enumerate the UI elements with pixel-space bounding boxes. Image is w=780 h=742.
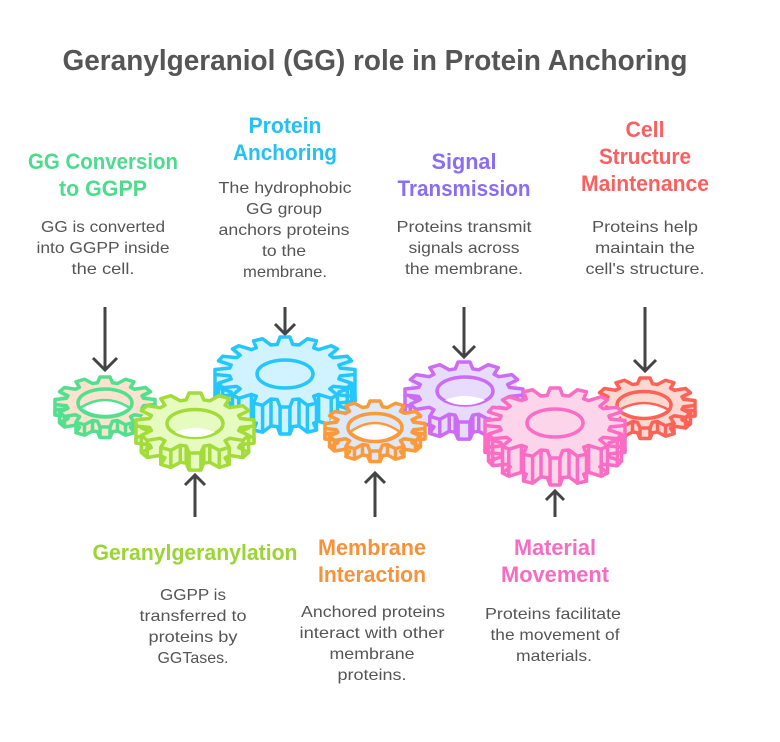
text: membrane interaction description: membrane — [330, 646, 415, 663]
text: signal transmission description: the membrane. — [405, 261, 523, 278]
arrow: up to lime gear — [185, 475, 205, 517]
text: membrane interaction description: Anchored proteins — [301, 604, 445, 621]
title: Geranylgeraniol (GG) role in Protein Anchoring — [62, 45, 688, 77]
heading: Cell Structure Maintenance: Cell — [626, 117, 664, 142]
heading: Protein Anchoring — [233, 113, 337, 165]
heading: Material Movement: Movement — [501, 562, 610, 587]
heading: Protein Anchoring: Protein — [248, 113, 322, 138]
text: membrane interaction description: interact with other — [300, 625, 445, 642]
heading: Membrane Interaction: Interaction — [318, 562, 426, 587]
text: protein anchoring description: GG group — [246, 201, 322, 218]
text: cell structure description — [586, 219, 704, 278]
text: protein anchoring description: to the — [262, 243, 306, 260]
text: GG conversion description — [36, 219, 170, 278]
heading: GG Conversion to GGPP: GG Conversion — [28, 149, 178, 174]
heading: Cell Structure Maintenance: Structure — [599, 144, 691, 169]
heading: Signal Transmission — [398, 149, 530, 201]
arrow: up to pink gear — [546, 491, 564, 517]
text: membrane interaction description: proteins. — [338, 667, 406, 684]
text: GG conversion description: into GGPP inside — [36, 240, 170, 257]
text: protein anchoring description: anchors proteins — [218, 222, 350, 239]
heading: Cell Structure Maintenance: Maintenance — [581, 171, 709, 196]
gear: green — [55, 377, 155, 438]
gear: pink — [485, 388, 625, 485]
heading: Protein Anchoring: Anchoring — [233, 140, 337, 165]
text: signal transmission description: signals across — [408, 240, 520, 257]
text: GG conversion description: the cell. — [72, 261, 134, 278]
text: material movement description: Proteins facilitate — [485, 606, 621, 623]
heading: Membrane Interaction: Membrane — [318, 535, 426, 560]
gear: lime — [136, 393, 254, 470]
text: geranylgeranylation description: proteins by — [148, 629, 238, 646]
gear: blue — [215, 337, 355, 434]
text: GG conversion description: GG is converted — [41, 219, 165, 236]
text: signal transmission description: Proteins transmit — [396, 219, 532, 236]
text: membrane interaction description — [300, 604, 445, 684]
arrow: down to purple gear — [453, 307, 475, 357]
arrow: down to blue gear — [275, 307, 295, 334]
heading: Material Movement — [501, 535, 610, 587]
text: material movement description: the movement of — [490, 627, 620, 644]
gear: purple — [405, 362, 523, 439]
text: protein anchoring description — [218, 180, 352, 281]
text: signal transmission description — [396, 219, 532, 278]
text: geranylgeranylation description — [140, 587, 247, 667]
arrow: down to green gear — [93, 307, 117, 370]
text: cell structure description: cell's structure. — [586, 261, 704, 278]
text: material movement description — [485, 606, 621, 665]
text: geranylgeranylation description: transferred to — [140, 608, 247, 625]
heading: Cell Structure Maintenance — [581, 117, 709, 196]
heading: Material Movement: Material — [514, 535, 596, 560]
text: cell structure description: Proteins help — [592, 219, 698, 236]
gear: red — [595, 378, 695, 438]
heading: Signal Transmission: Transmission — [398, 176, 530, 201]
text: geranylgeranylation description: GGTases. — [158, 650, 228, 667]
text: cell structure description: maintain the — [595, 240, 695, 257]
text: material movement description: materials. — [516, 648, 592, 665]
heading: GG Conversion to GGPP — [28, 149, 178, 201]
text: geranylgeranylation description: GGPP is — [160, 587, 226, 604]
text: protein anchoring description: membrane. — [243, 264, 327, 281]
gear: orange — [325, 401, 425, 462]
heading: GG Conversion to GGPP: to GGPP — [59, 176, 147, 201]
heading: Membrane Interaction — [318, 535, 426, 587]
heading: Geranylgeranylation: Geranylgeranylation — [92, 540, 298, 565]
heading: Signal Transmission: Signal — [432, 149, 496, 174]
arrow: up to orange gear — [365, 473, 385, 517]
text: protein anchoring description: The hydrophobic — [218, 180, 352, 197]
arrow: down to red gear — [634, 307, 656, 371]
